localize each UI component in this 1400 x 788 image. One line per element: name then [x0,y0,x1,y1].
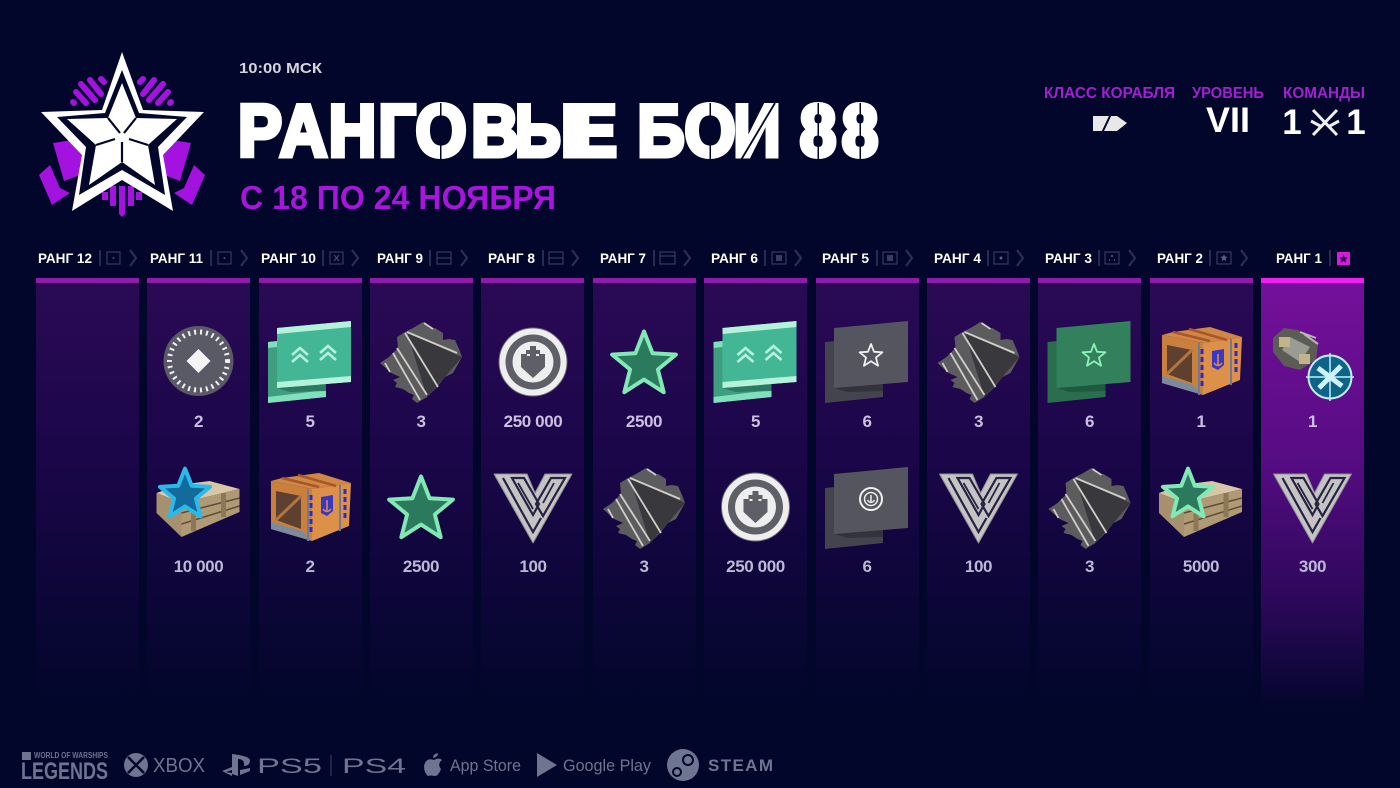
rank column 11 [147,250,250,712]
footer: game logo [21,751,109,785]
footer: PlayStation: PS4 [342,755,407,778]
reward: signal: 2 [194,412,203,431]
reward: doubloon coin [499,328,567,431]
footer: App Store [424,753,521,776]
rank column 10: РАНГ 10 [261,250,316,266]
reward: elite points: 300 [1299,557,1326,576]
footer: PlayStation [222,754,407,778]
rank column 7 [593,250,696,712]
info: ship class [1044,85,1175,133]
reward: ship upgrade with target [1273,328,1354,431]
reward: camouflage [380,322,462,431]
rank column 9 [370,250,473,712]
footer: PlayStation: PS5 [257,755,322,778]
reward: blue star crate [156,469,240,576]
footer: Steam [667,749,773,781]
rank column 8 [481,250,584,712]
footer: Xbox: XBOX [153,755,205,777]
rank column 8: РАНГ 8 [488,250,535,266]
rank column 10 [259,250,362,712]
reward: green star [612,331,676,431]
time label: 10:00 МСК [239,60,323,77]
reward: signal [164,326,234,431]
rank column 5 [816,250,919,712]
reward: orange crate: 1 [1196,412,1206,431]
reward: gray flag with anchor [825,467,908,576]
reward: green star: 2500 [403,557,439,576]
footer: Xbox [124,753,205,777]
rank column 2 [1150,250,1253,712]
reward: orange crate [1162,327,1242,431]
reward: teal flags: 5 [305,412,315,431]
rank column 12 [36,250,139,712]
info: teams: 1 [1346,103,1366,142]
logo: ranked battles star [39,52,205,217]
info: tier: УРОВЕНЬ [1192,85,1264,102]
reward: orange crate [271,473,351,576]
reward: camouflage [1048,468,1130,576]
rank column 4 [927,250,1030,712]
info: teams: КОМАНДЫ [1283,85,1365,102]
rank column 1: РАНГ 1 [1276,250,1322,266]
reward: gray flag with star [825,321,908,431]
reward: green star crate [1159,469,1242,576]
reward: elite points [494,474,572,576]
reward: teal flags [268,321,351,431]
info: ship class: КЛАСС КОРАБЛЯ [1044,85,1175,102]
reward: teal flags [714,321,796,431]
rank column 3 [1038,250,1141,712]
rank column 9: РАНГ 9 [377,250,423,266]
rank column 4: РАНГ 4 [934,250,981,266]
info: tier: VII [1206,101,1250,140]
footer: game logo: LEGENDS [21,758,108,785]
footer: Steam: STEAM [708,756,773,775]
reward: green star: 2500 [626,412,662,431]
rank column 12: РАНГ 12 [38,250,92,266]
reward: elite points: 100 [965,557,992,576]
footer: Google Play: Google Play [563,756,651,775]
reward: gray flag with star: 6 [862,412,872,431]
reward: doubloon coin: 250 000 [726,557,785,576]
footer: Google Play [537,753,651,777]
reward: green flag with star: 6 [1085,412,1094,431]
rank column 1 [1261,250,1364,712]
info: teams: 1 [1282,103,1302,142]
reward: camouflage: 3 [639,557,649,576]
rank column 2: РАНГ 2 [1157,250,1203,266]
rank column 7: РАНГ 7 [600,250,646,266]
rank column 5: РАНГ 5 [822,250,869,266]
reward: camouflage: 3 [416,412,426,431]
reward: gray flag with anchor: 6 [862,557,872,576]
rank column 11: РАНГ 11 [150,250,203,266]
reward: green star crate: 5000 [1183,557,1219,576]
reward: elite points: 100 [519,557,547,576]
footer: App Store: App Store [450,756,521,775]
subtitle: dates: С 18 ПО 24 НОЯБРЯ [240,179,556,216]
reward: green star [389,476,453,576]
reward: camouflage: 3 [1085,557,1094,576]
info: tier [1192,85,1264,140]
reward: camouflage: 3 [974,412,983,431]
reward: ship upgrade with target: 1 [1308,412,1317,431]
reward: orange crate: 2 [305,557,315,576]
reward: camouflage [603,468,685,576]
reward: doubloon coin [722,473,790,576]
rank column 3: РАНГ 3 [1045,250,1092,266]
rank column 6: РАНГ 6 [711,250,758,266]
rank column 6 [704,250,807,712]
reward: blue star crate: 10 000 [174,557,223,576]
reward: elite points [1274,474,1352,576]
footer: game logo: WORLD OF WARSHIPS [34,751,109,760]
reward: teal flags: 5 [751,412,760,431]
reward: doubloon coin: 250 000 [504,412,562,431]
info: teams [1282,85,1366,142]
reward: camouflage [938,322,1020,431]
reward: green flag with star [1048,321,1130,431]
title: РАНГОВЫЕ БОИ 88 [238,90,878,172]
reward: elite points [940,474,1018,576]
